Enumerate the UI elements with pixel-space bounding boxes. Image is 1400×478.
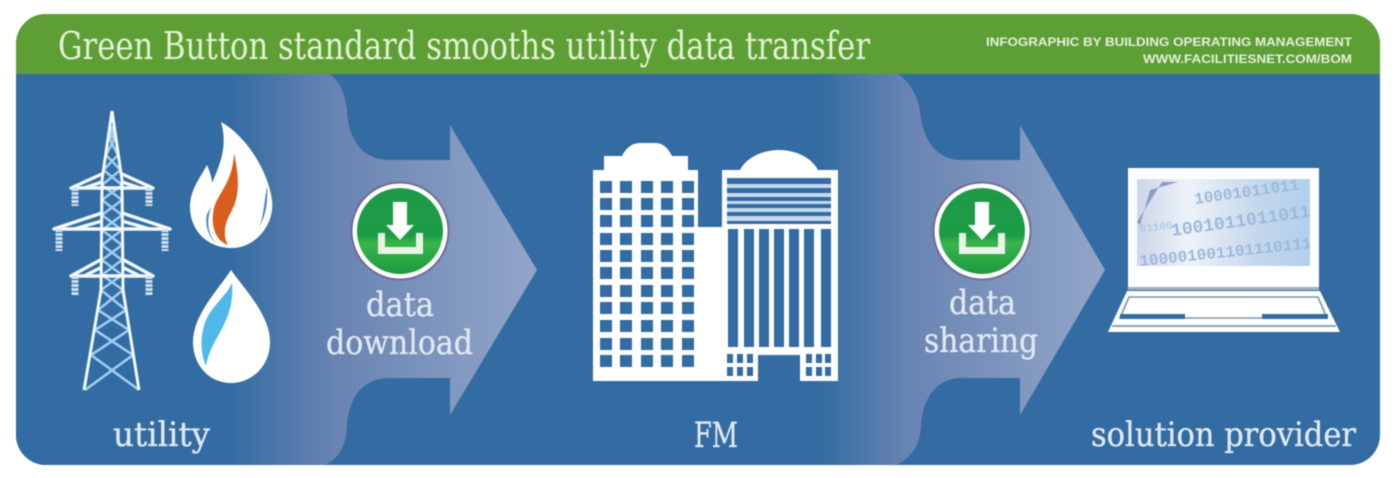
credit xyxy=(986,35,1353,66)
icon: flame xyxy=(190,122,272,248)
windows: left tower xyxy=(600,181,694,367)
title: Green Button standard smooths utility data transfer xyxy=(58,24,871,68)
label: data download: data xyxy=(366,285,434,325)
arrow: data download xyxy=(16,74,537,465)
binary data image: 01100 xyxy=(1139,221,1173,236)
icon: buildings xyxy=(593,143,838,381)
label: data sharing: data xyxy=(949,283,1016,323)
label: data download xyxy=(326,285,473,363)
label: data sharing: sharing xyxy=(924,321,1038,361)
label: data sharing xyxy=(924,283,1038,361)
label: utility: utility xyxy=(113,415,211,455)
credit: WWW.FACILITIESNET.COM/BOM xyxy=(1143,52,1352,66)
icon: water drop xyxy=(193,270,270,383)
label: solution provider: solution provider xyxy=(1091,415,1357,455)
icon: laptop xyxy=(1108,168,1340,332)
credit: INFOGRAPHIC BY BUILDING OPERATING MANAGEMENT xyxy=(986,35,1353,49)
arrow: data sharing xyxy=(834,74,1106,466)
binary data image: 10001011011 xyxy=(1193,176,1300,209)
label: FM: FM xyxy=(694,416,738,456)
icon: transmission tower xyxy=(54,111,170,390)
windows: right tower xyxy=(727,178,831,376)
icon: green download button 1 xyxy=(350,182,450,280)
binary data image xyxy=(1139,176,1312,271)
icon: green download button 2 xyxy=(932,182,1032,280)
binary data image: 1001011011011 xyxy=(1170,203,1312,242)
binary data image: 100001001101110111 xyxy=(1139,235,1312,271)
header band xyxy=(16,14,1380,74)
label: data download: download xyxy=(326,323,473,363)
